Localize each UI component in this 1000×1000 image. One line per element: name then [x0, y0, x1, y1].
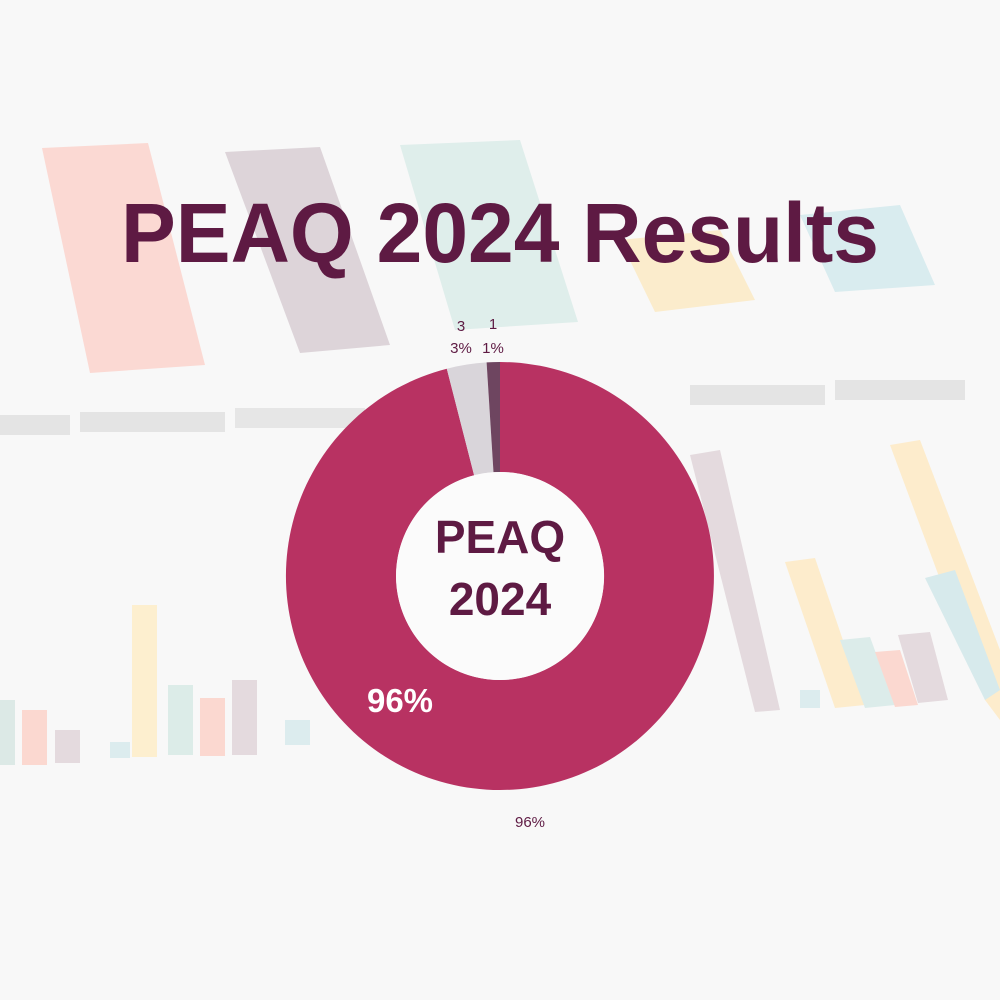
- center label: PEAQ: [435, 511, 565, 563]
- outer labels: 1%: [482, 340, 504, 357]
- donut chart: [286, 362, 714, 790]
- center hole: [396, 472, 604, 680]
- donut chart: 2024: [449, 573, 552, 625]
- segment: 96%: [286, 362, 714, 790]
- outer labels: 3: [457, 318, 465, 335]
- inner label 96%: 96%: [367, 682, 433, 719]
- title: PEAQ 2024 Results: [121, 186, 879, 280]
- outer labels: 1: [489, 316, 497, 333]
- segment: 3%: [447, 362, 494, 475]
- segment: 1%: [487, 362, 500, 472]
- outer labels: 96%: [515, 814, 545, 831]
- outer labels: [450, 316, 545, 831]
- outer labels: 3%: [450, 340, 472, 357]
